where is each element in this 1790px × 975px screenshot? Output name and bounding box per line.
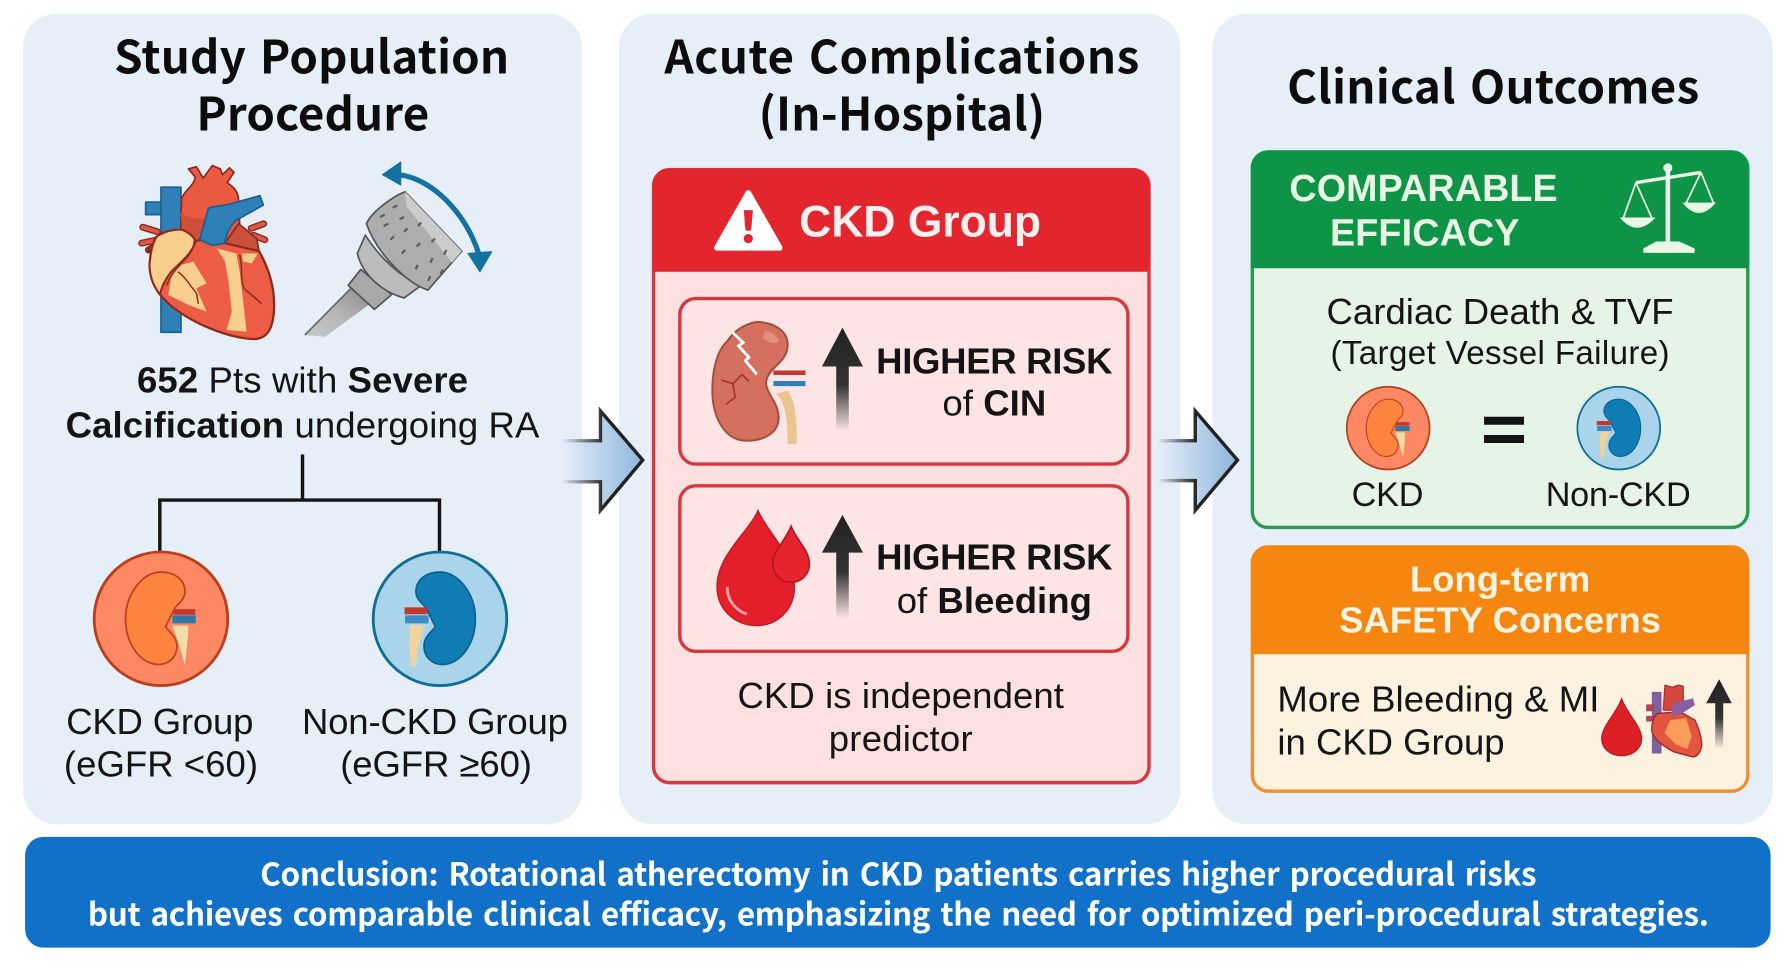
icon: blood drop — [1602, 699, 1642, 756]
text: higher risk of CIN: HIGHER RISK — [876, 340, 1113, 381]
text: higher risk of bleeding: HIGHER RISK — [876, 537, 1113, 578]
text: CKD is independent predictor — [737, 675, 1064, 759]
text: patient count: 652 Pts with Severe — [137, 360, 468, 401]
equals sign — [1484, 417, 1524, 443]
icon: CKD kidney small — [1347, 387, 1430, 470]
icon: damaged kidney — [712, 322, 806, 444]
icon: non-CKD kidney — [373, 552, 507, 686]
heading: acute complications: Acute Complications — [663, 22, 1139, 88]
conclusion text: Conclusion: Rotational atherectomy in CKD patients carries higher procedural risks — [260, 850, 1537, 895]
header text: SAFETY Concerns — [1339, 599, 1661, 640]
text: more bleeding and MI: More Bleeding & MI — [1277, 678, 1599, 719]
conclusion banner — [25, 837, 1771, 948]
text: cardiac death and TVF — [1327, 291, 1674, 372]
text: higher risk of bleeding: of Bleeding — [897, 580, 1092, 621]
conclusion text — [88, 850, 1709, 935]
icon: blood drops — [717, 510, 809, 626]
tree connector — [160, 454, 440, 553]
text: higher risk of CIN — [876, 340, 1113, 424]
heading: study population procedure: Study Population — [114, 22, 509, 88]
heading: acute complications: (In-Hospital) — [759, 79, 1045, 145]
heading: study population procedure: Procedure — [196, 79, 429, 145]
icon: heart — [142, 166, 274, 339]
text: more bleeding and MI — [1277, 678, 1599, 763]
arrow: population to complications — [562, 411, 643, 510]
label: non-CKD group: (eGFR ≥60) — [340, 743, 532, 784]
text: CKD is independent predictor: predictor — [829, 718, 973, 759]
label: non-CKD group — [302, 701, 568, 784]
arrow: complications to outcomes — [1158, 411, 1237, 510]
icon: balance scales — [1621, 164, 1715, 252]
label: CKD group: CKD Group — [66, 701, 253, 742]
header text — [1289, 167, 1558, 253]
label: CKD group: (eGFR <60) — [64, 743, 258, 784]
text: cardiac death and TVF: (Target Vessel Failure) — [1331, 335, 1670, 372]
icon: CKD kidney — [94, 552, 228, 686]
text: patient count: Calcification undergoing RA — [66, 404, 540, 445]
icon: up arrow — [822, 515, 863, 619]
icon: small heart — [1646, 685, 1702, 757]
header text — [1339, 558, 1661, 640]
icon: warning triangle — [717, 193, 780, 248]
conclusion text: but achieves comparable clinical efficacy, emphasizing the need for optimized peri-procedural strategies. — [88, 890, 1709, 935]
text: patient count — [66, 360, 540, 445]
icon: rotational atherectomy burr — [305, 162, 492, 337]
text: higher risk of bleeding — [876, 537, 1113, 621]
card: higher risk of bleeding — [680, 486, 1128, 651]
header text: Long-term — [1410, 558, 1590, 599]
header text: EFFICACY — [1330, 211, 1519, 253]
label: CKD group — [64, 701, 258, 784]
icon: small up arrow — [1706, 679, 1732, 749]
panel: study population procedure — [23, 14, 582, 824]
icon: non-CKD kidney small — [1577, 387, 1660, 470]
text: cardiac death and TVF: Cardiac Death & TVF — [1327, 291, 1674, 332]
text: CKD is independent predictor: CKD is independent — [737, 675, 1064, 716]
icon: up arrow — [822, 328, 863, 432]
heading: clinical outcomes: Clinical Outcomes — [1287, 51, 1699, 117]
card: higher risk of CIN — [680, 299, 1128, 464]
header label: CKD Group — [799, 197, 1041, 246]
label: non-CKD group: Non-CKD Group — [302, 701, 568, 742]
label: non-CKD: Non-CKD — [1546, 476, 1691, 514]
text: more bleeding and MI: in CKD Group — [1277, 722, 1505, 763]
green card: comparable efficacy — [1251, 151, 1749, 527]
panel: acute complications — [619, 14, 1180, 824]
red CKD group card — [653, 169, 1150, 783]
text: higher risk of CIN: of CIN — [942, 383, 1046, 424]
orange card: long-term safety concerns — [1251, 546, 1749, 791]
heading: acute complications — [663, 22, 1139, 145]
panel: clinical outcomes — [1212, 14, 1773, 824]
header text: COMPARABLE — [1289, 167, 1558, 209]
heading: study population procedure — [114, 22, 509, 145]
label: CKD: CKD — [1352, 476, 1424, 514]
